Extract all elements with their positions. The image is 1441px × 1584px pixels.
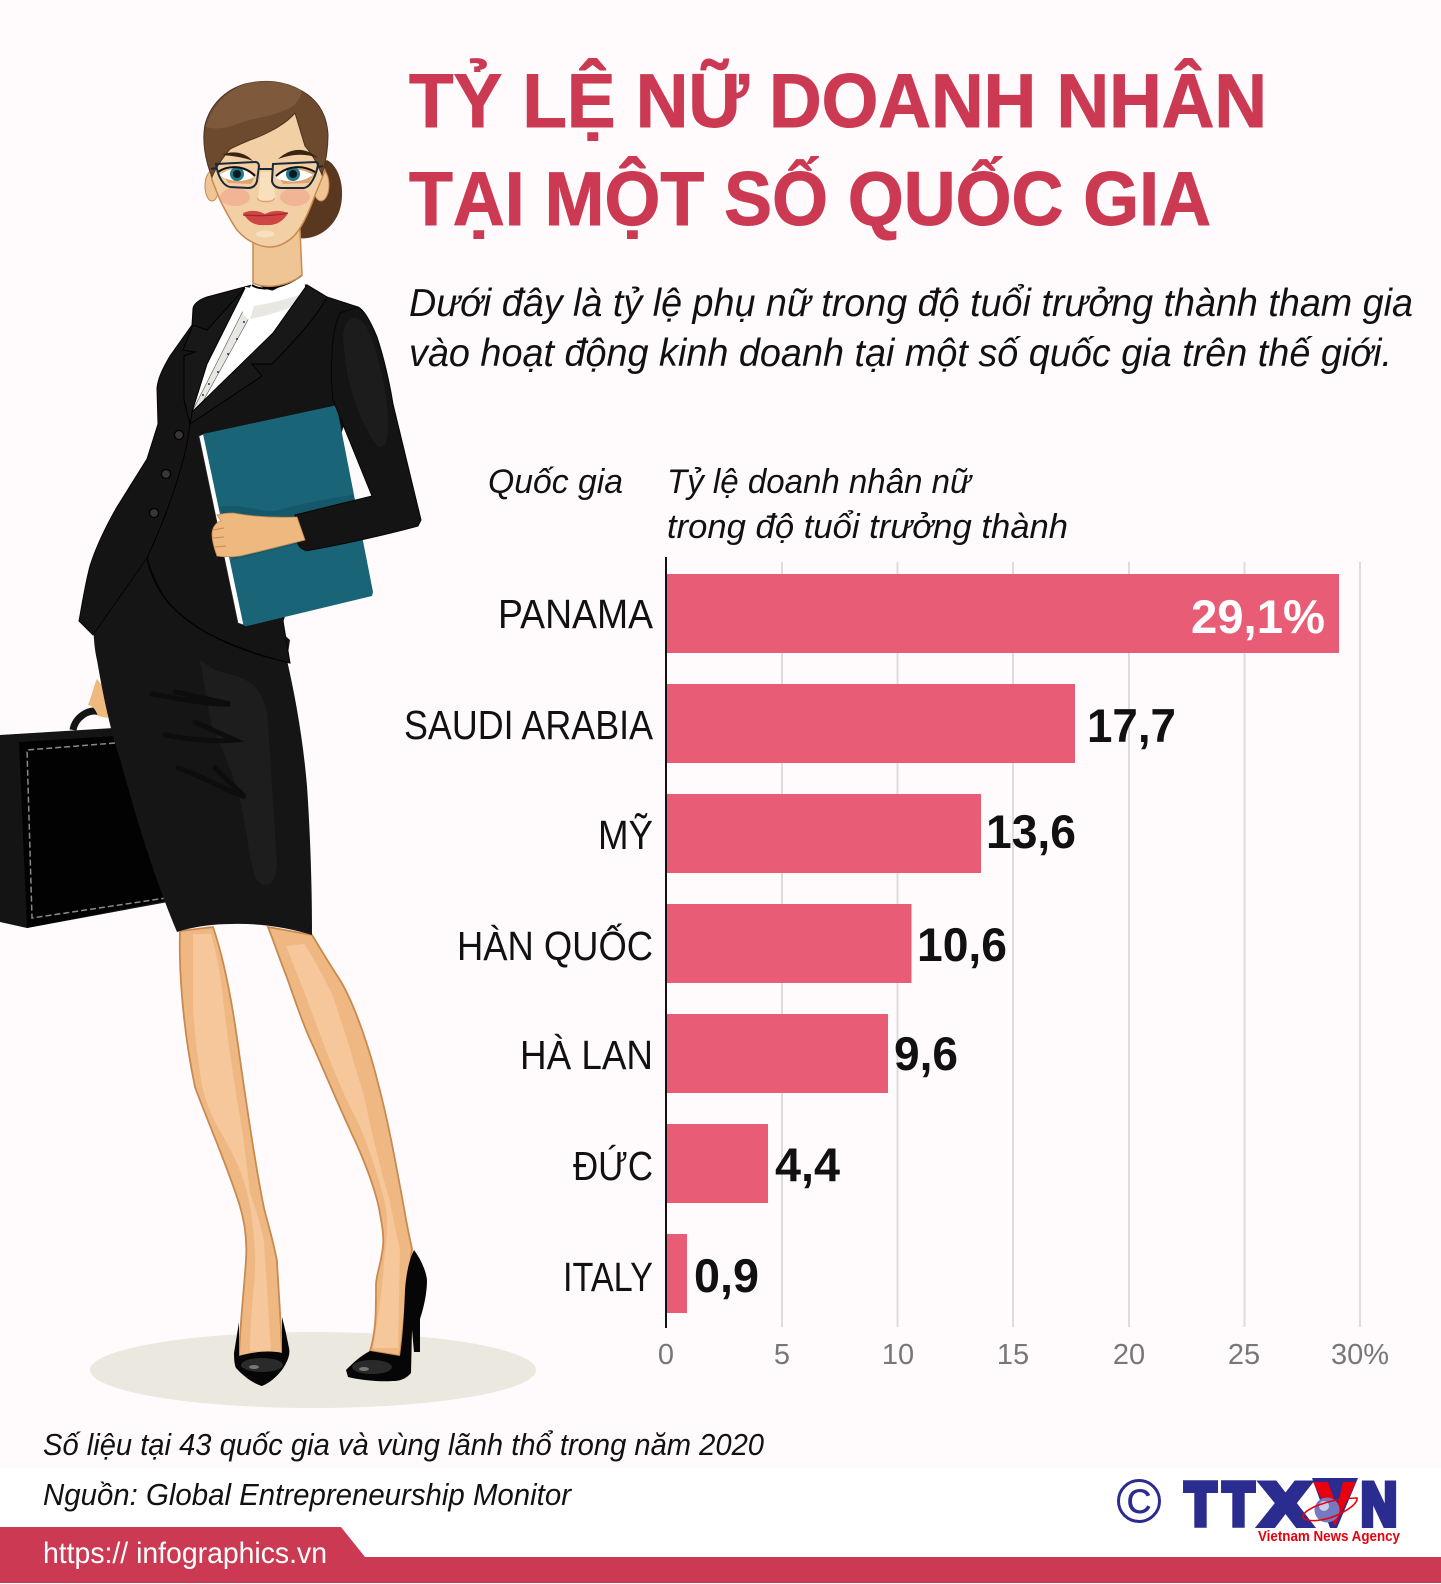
icon: copyright [1118,1480,1160,1522]
country labels: ĐỨC [573,1143,653,1189]
sleeve and forearm [295,307,421,551]
bars [666,574,1339,1313]
country labels: HÀN QUỐC [457,923,653,969]
logo: TTXVN: N [1361,1471,1397,1538]
chart column headers: Tỷ lệ doanh nhân nữ [667,463,973,501]
x axis ticks: 10 [882,1339,914,1371]
value labels: 9,6 [894,1027,958,1080]
intro text: vào hoạt động kinh doanh tại một số quốc gia trên thế giới. [409,332,1392,375]
title: TẠI MỘT SỐ QUỐC GIA [409,157,1211,242]
source notes: Số liệu tại 43 quốc gia và vùng lãnh thổ trong năm 2020 [43,1427,764,1462]
country labels: PANAMA [498,591,654,637]
country labels: ITALY [563,1254,653,1300]
logo: TTXVN: Vietnam News Agency [1258,1528,1401,1545]
blouse [192,275,307,414]
head [204,81,342,286]
title [409,58,1267,242]
value labels: 13,6 [986,805,1076,858]
footer bar [0,1527,1441,1583]
value labels: 17,7 [1087,699,1176,752]
chart column headers: trong độ tuổi trưởng thành [667,508,1068,546]
intro text [409,282,1413,375]
x axis ticks: 0 [658,1339,674,1371]
illustration: ground shadow [90,1332,536,1408]
logo: TTXVN: T [1185,1471,1216,1538]
hand [212,513,305,557]
logo: TTXVN: X [1261,1471,1310,1538]
country labels: MỸ [598,812,653,858]
country labels [404,591,654,1300]
illustration: businesswoman [0,81,427,1386]
value labels: 4,4 [775,1138,840,1191]
x axis ticks: 30% [1331,1339,1389,1371]
value labels: 29,1% [1191,590,1325,643]
value labels [694,590,1325,1302]
country labels: HÀ LAN [520,1032,653,1078]
x axis ticks: 20 [1113,1339,1145,1371]
lapels [183,285,327,424]
icon: glasses [211,162,323,188]
value labels: 10,6 [917,918,1007,971]
source notes [43,1427,764,1512]
legs [180,927,412,1356]
icon: high heel shoes [234,1250,427,1386]
icon: teal folder [199,406,373,626]
x axis ticks: 15 [997,1339,1029,1371]
website url: https:// infographics.vn [43,1537,327,1570]
buttons [150,430,184,518]
hair [204,81,328,177]
logo: TTXVN [1118,1471,1401,1545]
x axis ticks [658,1339,1389,1371]
title: TỶ LỆ NỮ DOANH NHÂN [409,58,1267,144]
skirt [93,550,312,935]
logo: TTXVN: T [1223,1471,1254,1538]
chart column headers: Quốc gia [488,463,623,501]
x axis ticks: 5 [774,1339,790,1371]
jacket [79,275,360,663]
intro text: Dưới đây là tỷ lệ phụ nữ trong độ tuổi trưởng thành tham gia [409,282,1413,325]
x axis ticks: 25 [1228,1339,1260,1371]
country labels: SAUDI ARABIA [404,702,654,748]
value labels: 0,9 [694,1249,759,1302]
bar chart [404,463,1389,1371]
icon: briefcase [0,679,168,928]
chart column headers [488,463,1068,546]
source notes: Nguồn: Global Entrepreneurship Monitor [43,1477,573,1512]
icon: copyright: C [1127,1483,1151,1521]
face features [218,150,318,238]
